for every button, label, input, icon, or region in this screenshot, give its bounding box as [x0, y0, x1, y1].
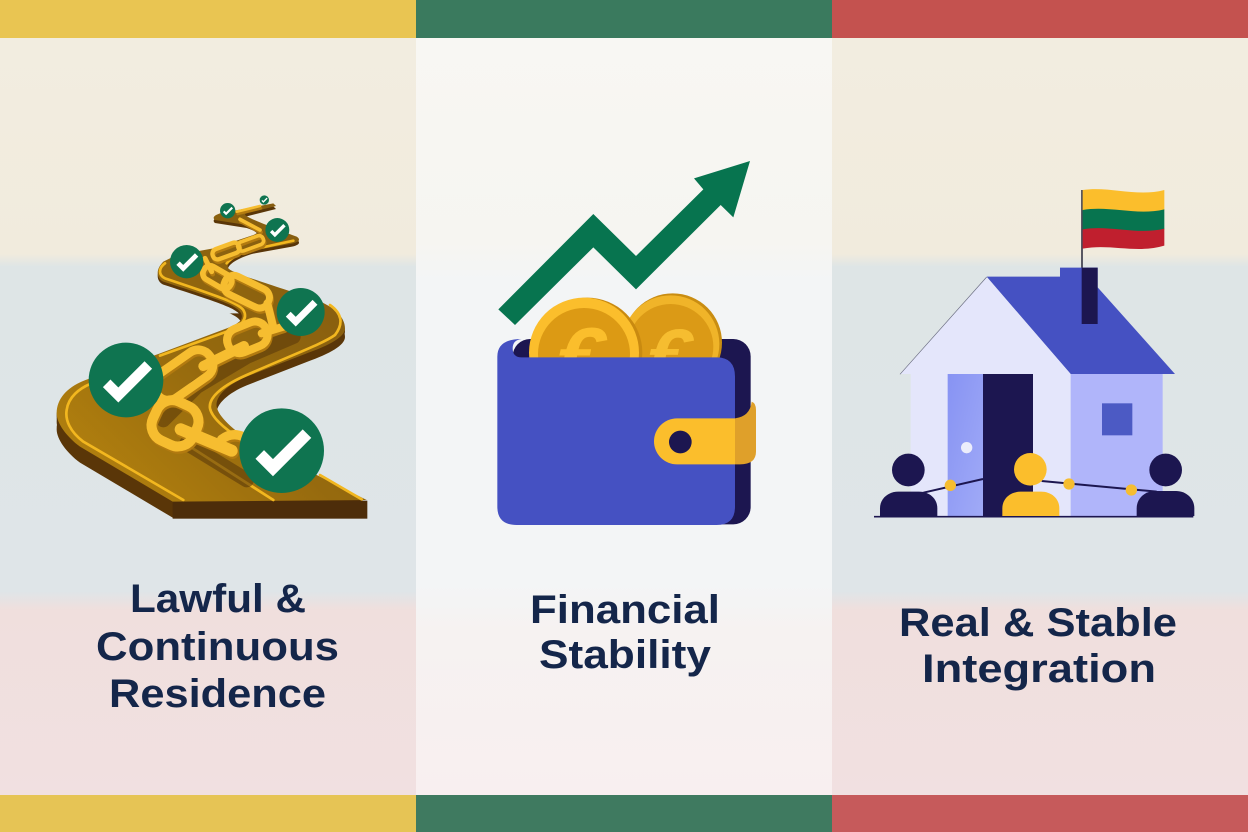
- heading: real and stable integration: Real & Stable: [899, 601, 1177, 645]
- window: [1102, 403, 1132, 435]
- bottom band: green: [416, 795, 832, 832]
- person: center: [1002, 453, 1059, 516]
- panel: financial stability: [416, 0, 832, 832]
- flag: [1083, 189, 1164, 249]
- heading: financial stability: [530, 588, 720, 677]
- ground line: [874, 514, 1193, 519]
- network nodes: [945, 478, 1137, 496]
- doorway: [983, 374, 1033, 516]
- check badge: right: [277, 288, 325, 336]
- road edge lines: [66, 241, 362, 500]
- check badge: large bottom: [239, 408, 324, 493]
- icon: house with flag and connected people: [874, 189, 1194, 517]
- person: left: [880, 454, 937, 516]
- heading: lawful and continuous residence: Lawful &: [130, 577, 306, 621]
- network links: [923, 479, 1157, 493]
- panel: lawful and continuous residence: [0, 0, 416, 832]
- chain underside: [147, 208, 284, 454]
- top band: green: [416, 0, 832, 38]
- heading: financial stability: Financial: [530, 588, 720, 632]
- flag pole: [1079, 190, 1084, 270]
- house roof: [987, 268, 1175, 374]
- heading: real and stable integration: [899, 601, 1177, 691]
- coin: front: [529, 298, 642, 408]
- heading: lawful and continuous residence: Residence: [109, 672, 326, 716]
- icon: wallet with euro coins and rising arrow: [497, 161, 756, 525]
- icon: winding golden road with chain and checkmarks: [57, 195, 367, 519]
- road side faces: [57, 206, 367, 519]
- check badge: upper right: [265, 218, 289, 242]
- coin: front: €: [556, 310, 608, 406]
- check badge: large left: [89, 343, 163, 417]
- top band: red: [832, 0, 1248, 38]
- check badge: far left: [220, 203, 235, 218]
- open door: [948, 374, 983, 516]
- chain links: [146, 206, 283, 452]
- coin: back: [622, 293, 722, 402]
- chimney: [1082, 268, 1098, 324]
- door knob: [961, 442, 972, 453]
- heading: lawful and continuous residence: Continuous: [96, 625, 339, 669]
- check badge: upper left: [170, 245, 203, 278]
- wallet strap: [654, 402, 756, 464]
- heading: real and stable integration: Integration: [922, 647, 1156, 691]
- road surface: [57, 203, 367, 502]
- chain shadow: [163, 337, 293, 480]
- wallet back: [513, 339, 751, 524]
- house side wall: [1071, 374, 1163, 516]
- house front wall: [900, 277, 1071, 516]
- check badge: far right: [260, 195, 269, 205]
- wallet front: [497, 339, 735, 525]
- bottom band: red: [832, 795, 1248, 832]
- heading: lawful and continuous residence: [96, 577, 339, 716]
- top band: yellow: [0, 0, 416, 38]
- heading: financial stability: Stability: [539, 633, 712, 677]
- panel: real and stable integration: [832, 0, 1248, 832]
- coin: back: €: [647, 313, 695, 402]
- person: right: [1137, 454, 1194, 516]
- rising arrow: [498, 161, 750, 325]
- bottom band: yellow: [0, 795, 416, 832]
